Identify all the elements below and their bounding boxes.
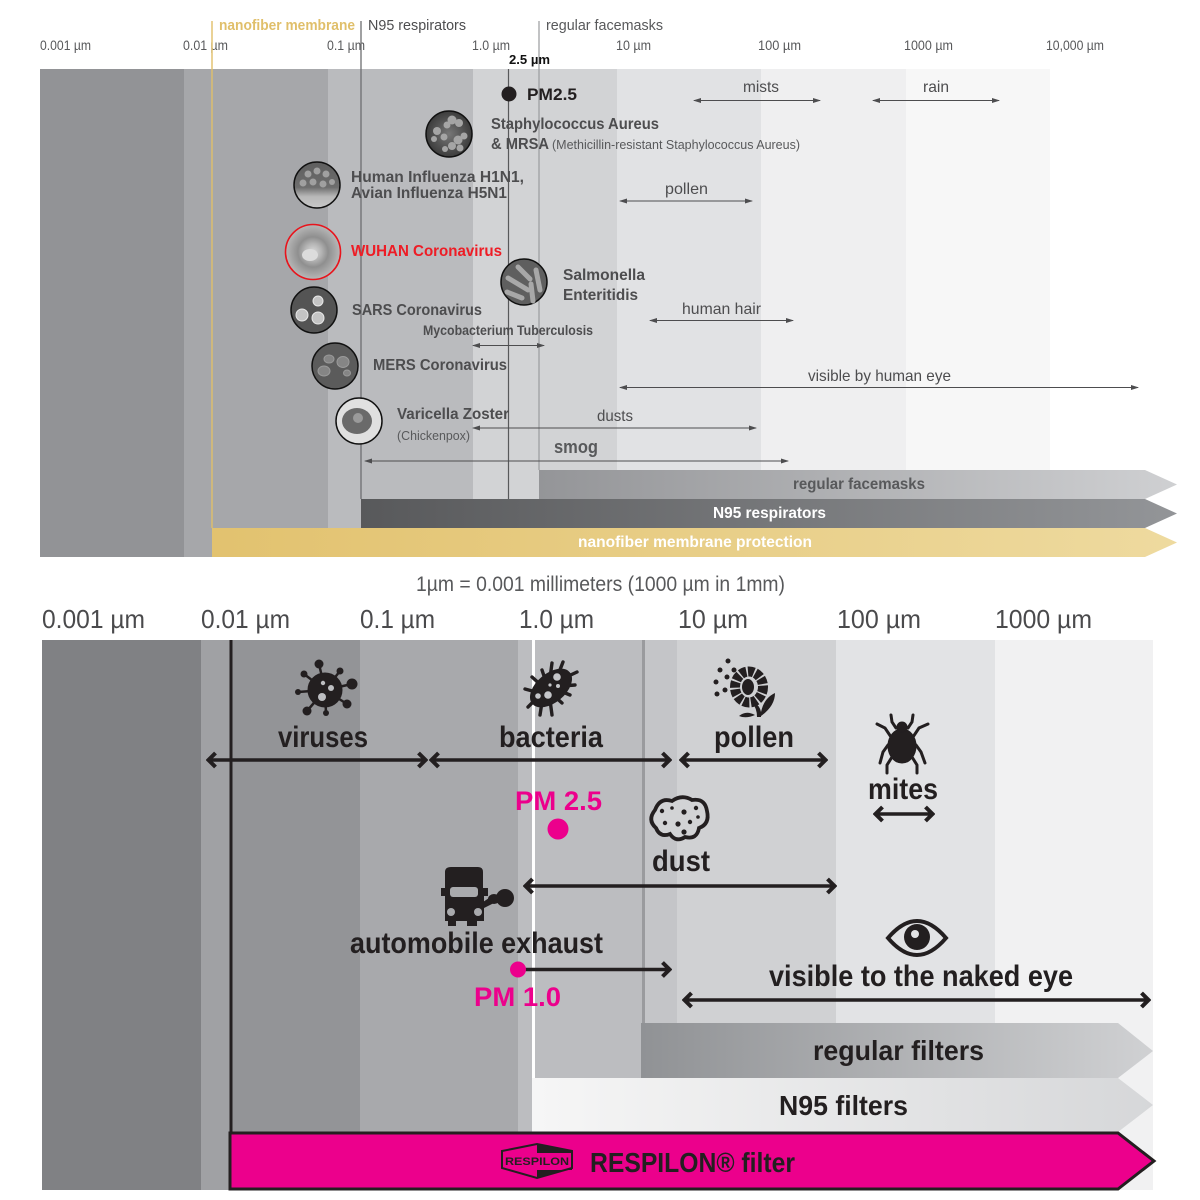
- bar: regular filters: regular filters: [813, 1035, 984, 1066]
- bar: regular filters: [641, 1023, 1153, 1078]
- bottom scale labels: [42, 604, 1092, 634]
- top scale labels: 0.01 µm: [183, 38, 228, 53]
- top scale labels: 0.1 µm: [327, 38, 365, 53]
- icon: virus: [295, 660, 358, 716]
- icon: Salmonella micrograph: [501, 259, 547, 305]
- bar: nanofiber membrane protection: nanofiber membrane protection: [578, 534, 812, 551]
- text: Wuhan coronavirus: WUHAN Coronavirus: [351, 243, 502, 260]
- PM 1.0 marker: PM 1.0: [474, 982, 561, 1012]
- text: influenza: Human Influenza H1N1,: [351, 169, 524, 186]
- icon: Wuhan coronavirus micrograph: [286, 224, 340, 280]
- PM2.5 marker: PM2.5: [527, 86, 577, 104]
- text: Salmonella Enteritidis: Salmonella: [563, 267, 645, 284]
- top scale labels: 1000 µm: [904, 38, 953, 53]
- top scale labels: 1.0 µm: [472, 38, 510, 53]
- filter threshold labels: [219, 18, 663, 67]
- icon: pollen flower: [714, 658, 775, 717]
- text: bacteria: bacteria: [499, 721, 603, 754]
- text: pollen: pollen: [714, 721, 794, 754]
- text: Staphylococcus Aureus and MRSA: & MRSA: [491, 136, 549, 153]
- text: Staphylococcus Aureus and MRSA: Staphylococcus Aureus: [491, 116, 659, 133]
- bottom scale labels: 0.01 µm: [201, 604, 290, 634]
- range: pollen: pollen: [665, 181, 708, 198]
- top scale labels: 100 µm: [758, 38, 801, 53]
- vertical line: Respilon threshold: [230, 640, 232, 1132]
- arrow: visible range: [684, 998, 1149, 1002]
- panel: top particle size chart: [40, 18, 1177, 557]
- text: mites: mites: [868, 773, 938, 806]
- icon: Respilon logo: [502, 1144, 572, 1178]
- bar: N95 respirators: [361, 499, 1177, 528]
- arrow: PM 1.0 range: [524, 968, 670, 971]
- text: Varicella Zoster: (Chickenpox): [397, 428, 470, 443]
- arrow: mites range: [875, 812, 933, 816]
- text: Staphylococcus Aureus and MRSA: (Methicillin-resistant Staphylococcus Aureus): [552, 137, 800, 152]
- text: Varicella Zoster: Varicella Zoster: [397, 406, 509, 423]
- bar: N95 respirators: N95 respirators: [713, 505, 826, 522]
- bar: Respilon filter: [230, 1133, 1154, 1189]
- text: Mycobacterium Tuberculosis: Mycobacterium Tuberculosis: [423, 323, 593, 338]
- icon: SARS micrograph: [291, 287, 337, 333]
- filter threshold labels: nanofiber membrane: [219, 18, 355, 34]
- arrow: viruses range: [208, 758, 426, 762]
- bottom scale labels: 1.0 µm: [519, 604, 594, 634]
- range: mists: [694, 79, 820, 100]
- range: smog: smog: [554, 437, 598, 457]
- bar: regular facemasks: regular facemasks: [793, 476, 925, 493]
- panel: bottom particle size chart: [42, 604, 1154, 1190]
- icon: dust cloud: [651, 797, 708, 839]
- range: human hair: human hair: [682, 301, 762, 318]
- icon: Varicella micrograph: [336, 398, 382, 444]
- bottom scale labels: 1000 µm: [995, 604, 1092, 634]
- arrow: pollen range: [681, 758, 826, 762]
- bar: nanofiber membrane protection: [212, 528, 1177, 557]
- text: Varicella Zoster: [397, 406, 509, 443]
- bottom size bands: [42, 640, 1153, 1190]
- bottom scale labels: 0.001 µm: [42, 604, 145, 634]
- range: pollen: [620, 181, 752, 201]
- PM 2.5 marker: [515, 786, 602, 840]
- text: Salmonella Enteritidis: Enteritidis: [563, 287, 638, 304]
- range: rain: rain: [923, 79, 949, 96]
- text: SARS coronavirus: SARS Coronavirus: [352, 302, 482, 319]
- filter threshold labels: regular facemasks: [546, 18, 663, 34]
- icon: mite: [877, 715, 928, 773]
- top scale labels: 10,000 µm: [1046, 38, 1104, 53]
- icon: MERS micrograph: [312, 343, 358, 389]
- PM2.5 marker: [502, 86, 577, 104]
- filter threshold labels: 2.5 µm: [509, 52, 550, 67]
- text: Staphylococcus Aureus and MRSA: [491, 116, 800, 153]
- text: influenza: [351, 169, 524, 202]
- arrow: bacteria range: [431, 758, 670, 762]
- icon: Staphylococcus micrograph: [426, 111, 472, 157]
- top scale labels: [40, 38, 1104, 53]
- bottom scale labels: 10 µm: [678, 604, 748, 634]
- icon: Respilon logo: RESPILON: [505, 1156, 569, 1168]
- filter threshold lines: [212, 21, 539, 528]
- PM 2.5 marker: PM 2.5: [515, 786, 602, 816]
- top scale labels: 10 µm: [616, 38, 651, 53]
- range: dusts: dusts: [597, 408, 633, 425]
- text: visible to the naked eye: visible to the naked eye: [769, 960, 1073, 993]
- PM 1.0 marker: [474, 962, 561, 1012]
- text: automobile exhaust: automobile exhaust: [350, 927, 603, 960]
- bar: regular facemasks: [539, 470, 1177, 499]
- arrow: Mycobacterium range: [473, 344, 544, 346]
- text: Salmonella Enteritidis: [563, 267, 645, 304]
- top scale labels: 0.001 µm: [40, 38, 91, 53]
- icon: bacteria: [524, 662, 578, 715]
- text: MERS coronavirus: MERS Coronavirus: [373, 357, 507, 374]
- text: dust: dust: [652, 845, 710, 878]
- arrow: dust range: [525, 884, 835, 888]
- bar: N95 filters: N95 filters: [779, 1090, 908, 1121]
- bar: N95 filters: [532, 1078, 1153, 1132]
- icon: truck exhaust: [441, 867, 514, 926]
- filter threshold labels: N95 respirators: [368, 18, 466, 34]
- icon: influenza micrograph: [294, 162, 340, 208]
- range: mists: mists: [743, 79, 779, 96]
- bottom scale labels: 0.1 µm: [360, 604, 435, 634]
- text: viruses: viruses: [278, 721, 368, 754]
- text: influenza: Avian Influenza H5N1: [351, 185, 507, 202]
- icon: eye: [888, 921, 946, 955]
- range: visible by human eye: visible by human eye: [808, 368, 951, 385]
- bottom scale labels: 100 µm: [837, 604, 921, 634]
- bar: Respilon filter: RESPILON® filter: [590, 1147, 795, 1178]
- unit note: 1µm = 0.001 millimeters (1000 µm in 1mm): [416, 573, 785, 596]
- range: rain: [873, 79, 999, 100]
- top size bands: [40, 69, 1050, 557]
